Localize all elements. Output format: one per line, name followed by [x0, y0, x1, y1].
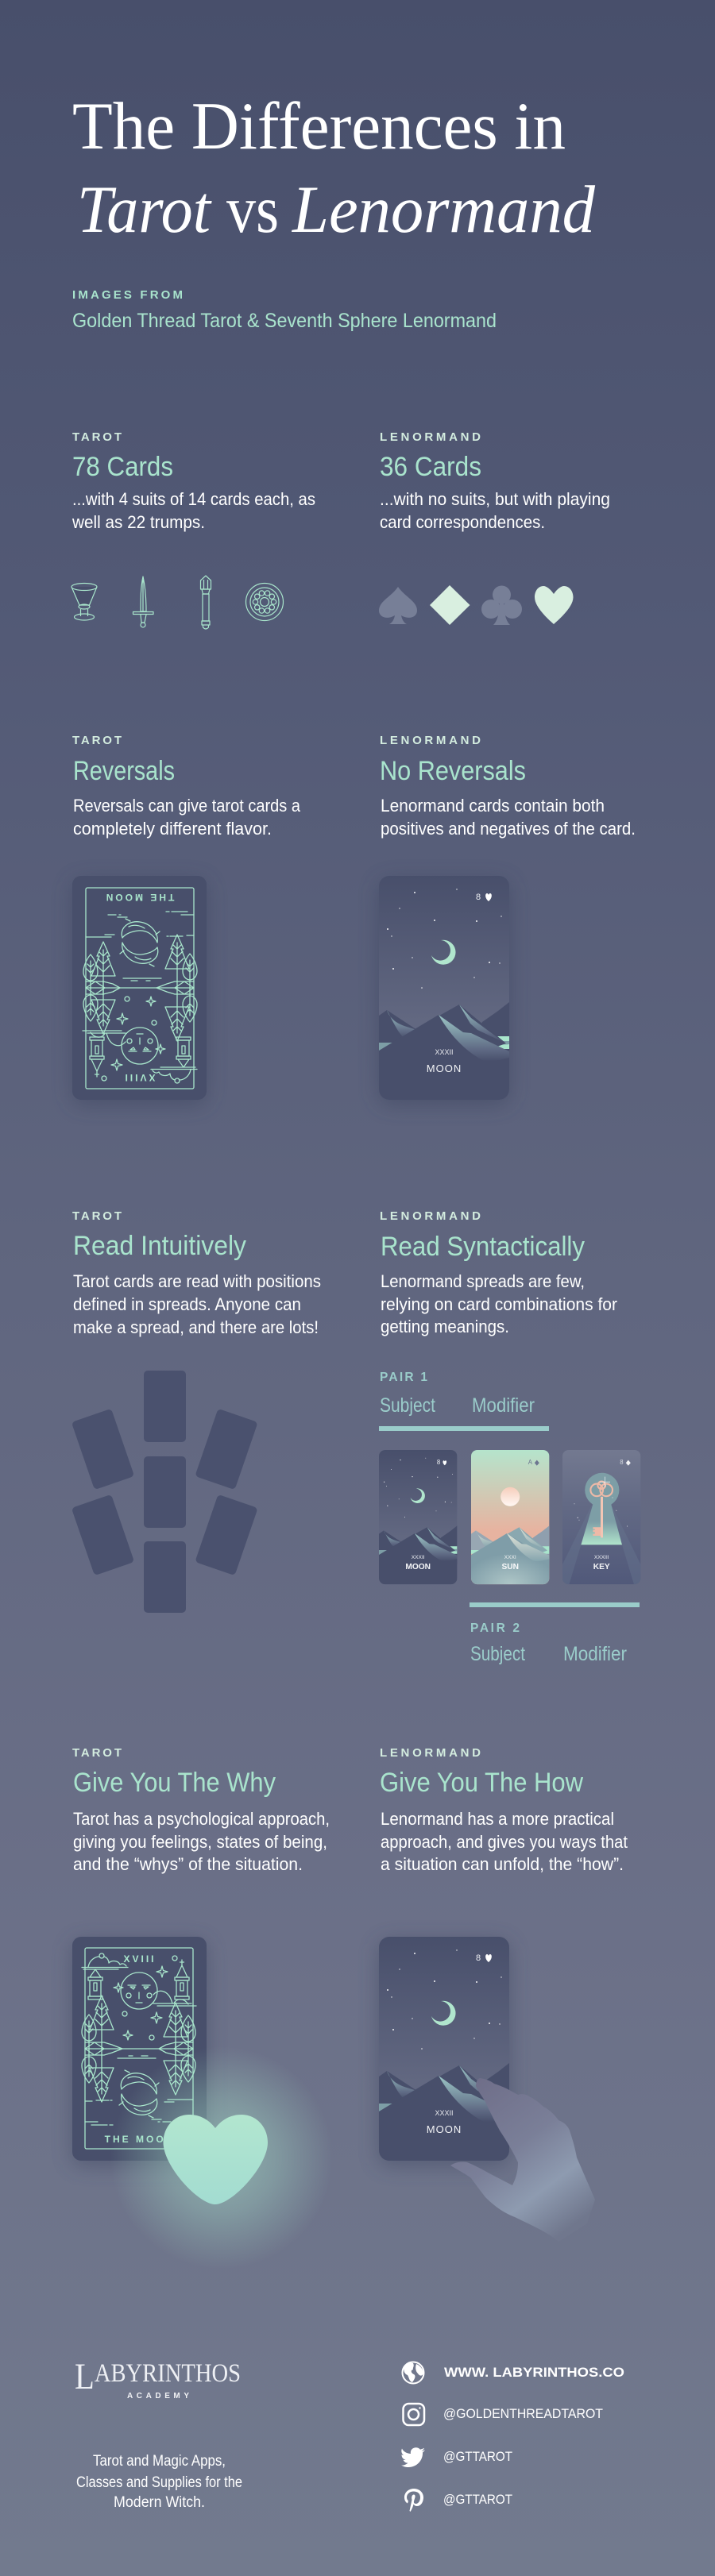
card: small moon: 8 — [437, 1459, 440, 1466]
glow behind heart — [110, 2046, 333, 2269]
card: small key — [562, 1450, 640, 1584]
image credits — [72, 288, 497, 332]
title: Lenormand — [292, 172, 595, 247]
legend: pair 2 — [470, 1602, 640, 1665]
panel: tarot card count: TAROT — [72, 430, 122, 444]
icon: cup — [72, 583, 97, 620]
panel: tarot read intuitively text: Tarot cards are read with positions — [73, 1271, 321, 1291]
contact: twitter: @GTTAROT — [443, 2449, 512, 2464]
panel: lenormand no reversals text: LENORMAND — [380, 734, 481, 747]
panel: lenormand give you the how text: a situation can unfold, the “how”. — [381, 1854, 624, 1874]
card: upright lenormand moon: XXXII — [435, 1048, 454, 1056]
card: upright lenormand moon: 8 — [476, 893, 481, 902]
panel: tarot reversals text: completely different flavor. — [73, 819, 272, 839]
panel: tarot card count: well as 22 trumps. — [72, 512, 205, 532]
card: small sun — [471, 1450, 549, 1584]
card: small moon: XXXII — [412, 1555, 425, 1560]
panel: lenormand read syntactically text: getting meanings. — [381, 1317, 509, 1336]
panel: lenormand read syntactically text: Read Syntactically — [381, 1232, 585, 1262]
image credits: Golden Thread Tarot & Seventh Sphere Lenormand — [72, 310, 497, 332]
card: upright tarot moon: THE MOON — [105, 2134, 175, 2145]
card: lenormand moon held by hand: XXXII — [435, 2109, 454, 2117]
panel: lenormand read syntactically text — [380, 1209, 617, 1336]
panel: lenormand give you the how text — [380, 1746, 628, 1874]
logo: labyrinthos academy — [75, 2356, 241, 2401]
icons: playing card suits — [379, 585, 574, 625]
panel: lenormand give you the how text: Lenormand has a more practical — [381, 1809, 614, 1829]
panel: tarot reversals text — [72, 734, 301, 839]
title: The Differences in — [72, 89, 566, 164]
panel: tarot read intuitively text: defined in spreads. Anyone can — [73, 1294, 301, 1314]
panel: lenormand no reversals text: positives and negatives of the card. — [381, 819, 636, 839]
card: small sun: SUN — [501, 1563, 519, 1571]
icon: club — [481, 586, 522, 625]
panel: lenormand card count: LENORMAND — [380, 430, 481, 444]
panel: tarot read intuitively text: make a spread, and there are lots! — [73, 1317, 319, 1337]
footer tagline — [76, 2453, 242, 2511]
logo: labyrinthos academy: ABYRINTHOS — [95, 2359, 241, 2388]
icons: tarot suits — [72, 576, 283, 629]
panel: lenormand give you the how text: Give You The How — [380, 1768, 583, 1798]
panel: lenormand read syntactically text: relying on card combinations for — [381, 1294, 617, 1314]
card: reversed tarot moon — [72, 876, 207, 1105]
icon: diamond — [430, 585, 470, 625]
card: lenormand moon held by hand: MOON — [427, 2123, 462, 2135]
title: Tarot — [77, 172, 212, 247]
icon: twitter — [401, 2447, 425, 2467]
panel: tarot give you the why text: and the “whys” of the situation. — [73, 1854, 303, 1874]
icon: spade — [379, 587, 417, 624]
icon: sword — [133, 577, 153, 627]
card: upright lenormand moon: MOON — [427, 1062, 462, 1074]
panel: tarot give you the why text — [72, 1746, 330, 1874]
icon: instagram — [404, 2404, 424, 2425]
panel: tarot read intuitively text: Read Intuitively — [73, 1231, 246, 1261]
panel: lenormand give you the how text: approach, and gives you ways that — [381, 1832, 628, 1852]
legend: pair 1 — [379, 1371, 549, 1431]
icon: globe — [402, 2362, 424, 2384]
panel: tarot give you the why text: TAROT — [72, 1746, 122, 1760]
panel: lenormand card count: card correspondences. — [380, 512, 545, 532]
card: small key: 8 — [620, 1459, 624, 1466]
panel: lenormand no reversals text: Lenormand cards contain both — [381, 796, 605, 816]
icon: pinterest — [404, 2489, 423, 2512]
illustration: hand — [450, 2078, 595, 2242]
legend: pair 2: Subject — [470, 1643, 525, 1665]
footer tagline: Tarot and Magic Apps, — [93, 2453, 226, 2470]
card: small moon: MOON — [405, 1563, 431, 1571]
panel: tarot reversals text: Reversals can give tarot cards a — [73, 796, 301, 816]
card: upright lenormand moon — [379, 876, 509, 1105]
card: lenormand moon held by hand — [379, 1937, 509, 2165]
panel: lenormand card count — [380, 430, 610, 532]
panel: lenormand card count: 36 Cards — [380, 452, 481, 482]
legend: pair 1: Subject — [380, 1394, 435, 1417]
contact: pinterest: @GTTAROT — [443, 2492, 512, 2507]
title — [72, 89, 595, 247]
card: reversed tarot moon: THE MOON — [104, 892, 174, 903]
panel: tarot give you the why text: giving you feelings, states of being, — [73, 1832, 327, 1852]
card: upright tarot moon — [72, 1937, 207, 2165]
panel: tarot card count: 78 Cards — [72, 452, 173, 482]
panel: lenormand read syntactically text: Lenormand spreads are few, — [381, 1271, 585, 1291]
panel: tarot read intuitively text: TAROT — [72, 1209, 122, 1223]
card: small key: XXXIII — [594, 1555, 609, 1560]
card: small sun: XXXI — [504, 1555, 516, 1560]
card: upright tarot moon: XVIII — [123, 1953, 157, 1965]
card: small moon — [379, 1450, 457, 1584]
card: small key: KEY — [593, 1563, 610, 1571]
panel: lenormand no reversals text — [380, 734, 636, 839]
card: small sun: A — [528, 1459, 533, 1466]
card: reversed tarot moon: XVIII — [122, 1072, 156, 1083]
icon: glowing heart — [164, 2115, 268, 2204]
panel: tarot read intuitively text — [72, 1209, 321, 1337]
image credits: IMAGES FROM — [72, 288, 183, 302]
footer tagline: Classes and Supplies for the — [76, 2474, 242, 2491]
icon: wand — [200, 576, 211, 629]
panel: lenormand read syntactically text: LENORMAND — [380, 1209, 481, 1223]
panel: tarot give you the why text: Tarot has a psychological approach, — [73, 1809, 330, 1829]
legend: pair 1: PAIR 1 — [380, 1371, 427, 1384]
panel: tarot reversals text: Reversals — [73, 756, 175, 786]
icon: heart — [535, 586, 574, 624]
legend: pair 2: PAIR 2 — [470, 1622, 520, 1635]
icon: pentacle — [246, 583, 283, 621]
logo: labyrinthos academy: ACADEMY — [127, 2392, 189, 2401]
chart: tarot spread of seven cards — [72, 1371, 258, 1613]
panel: lenormand card count: ...with no suits, but with playing — [380, 489, 610, 509]
panel: tarot reversals text: TAROT — [72, 734, 122, 747]
logo: labyrinthos academy: L — [75, 2356, 95, 2397]
title: vs — [226, 172, 279, 247]
panel: lenormand no reversals text: No Reversals — [380, 756, 526, 786]
panel: lenormand give you the how text: LENORMAND — [380, 1746, 481, 1760]
legend: pair 2: Modifier — [563, 1643, 627, 1665]
footer tagline: Modern Witch. — [114, 2494, 205, 2511]
contact: website: WWW. LABYRINTHOS.CO — [444, 2365, 624, 2380]
panel: tarot card count: ...with 4 suits of 14 cards each, as — [72, 489, 315, 509]
panel: tarot give you the why text: Give You The Why — [73, 1768, 276, 1798]
panel: tarot card count — [72, 430, 315, 532]
card: lenormand moon held by hand: 8 — [476, 1953, 481, 1963]
legend: pair 1: Modifier — [472, 1394, 535, 1417]
contact: instagram: @GOLDENTHREADTAROT — [443, 2406, 603, 2421]
